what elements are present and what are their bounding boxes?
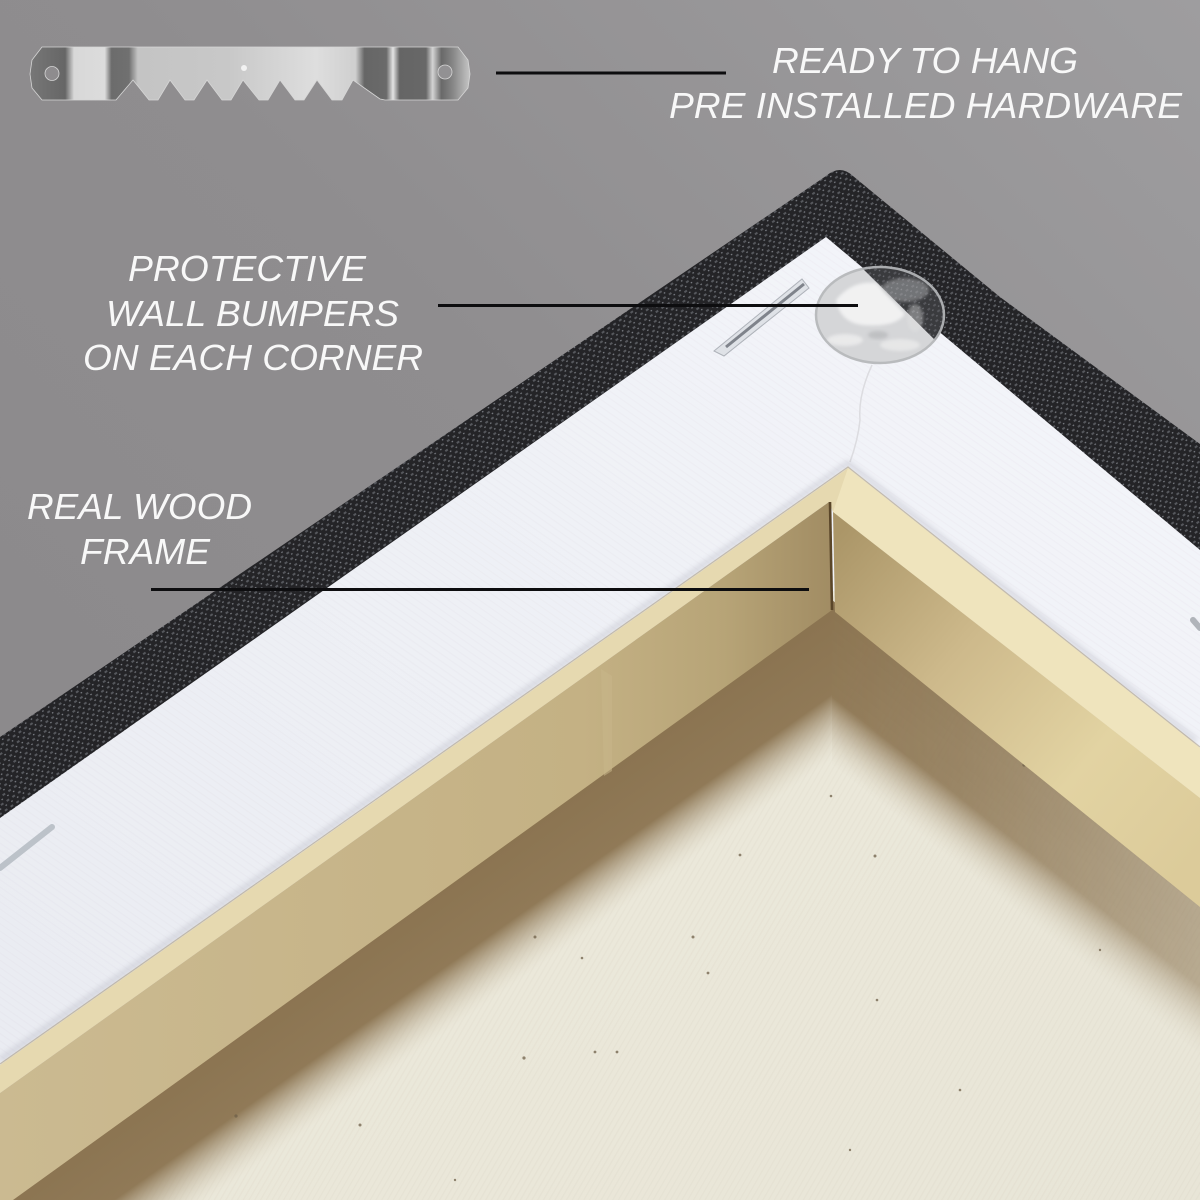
text: protective wall bumpers: ON EACH CORNER <box>83 337 423 378</box>
text: real wood frame: FRAME <box>80 531 211 572</box>
text: ready to hang: PRE INSTALLED HARDWARE <box>669 85 1183 126</box>
text: protective wall bumpers <box>83 248 423 378</box>
left inner face of wood frame <box>0 502 832 1200</box>
leader line: bumper <box>438 304 858 307</box>
text: real wood frame: REAL WOOD <box>27 486 252 527</box>
icon: sawtooth hanger <box>30 47 470 100</box>
leader line: hanger <box>496 72 726 74</box>
icon: staple top <box>714 279 809 356</box>
black edge seen through the bumper <box>864 268 943 339</box>
text: ready to hang: READY TO HANG <box>772 40 1078 81</box>
text: protective wall bumpers: PROTECTIVE <box>128 248 367 289</box>
corner joint <box>830 502 832 610</box>
wood shadow on canvas: right side <box>832 600 1200 1037</box>
bumper highlight <box>836 283 905 326</box>
panel: real wood frame <box>0 467 1200 1200</box>
mottled lower reflections <box>827 334 863 346</box>
leader line: wood frame <box>151 588 809 591</box>
wood shadow on canvas: left side <box>0 600 832 1200</box>
text: protective wall bumpers: WALL BUMPERS <box>106 293 399 334</box>
panel: raw canvas interior <box>0 590 1200 1200</box>
icon: staple left <box>0 827 52 868</box>
specks on canvas <box>234 763 1101 1181</box>
text: real wood frame <box>27 486 252 572</box>
icon: staple right <box>1193 620 1200 628</box>
icon: clear wall bumper <box>814 266 946 364</box>
top strip of wood frame <box>0 468 1200 1093</box>
refracted light patches <box>881 278 929 302</box>
text: ready to hang <box>669 40 1183 126</box>
right inner face of wood frame <box>833 512 1200 907</box>
